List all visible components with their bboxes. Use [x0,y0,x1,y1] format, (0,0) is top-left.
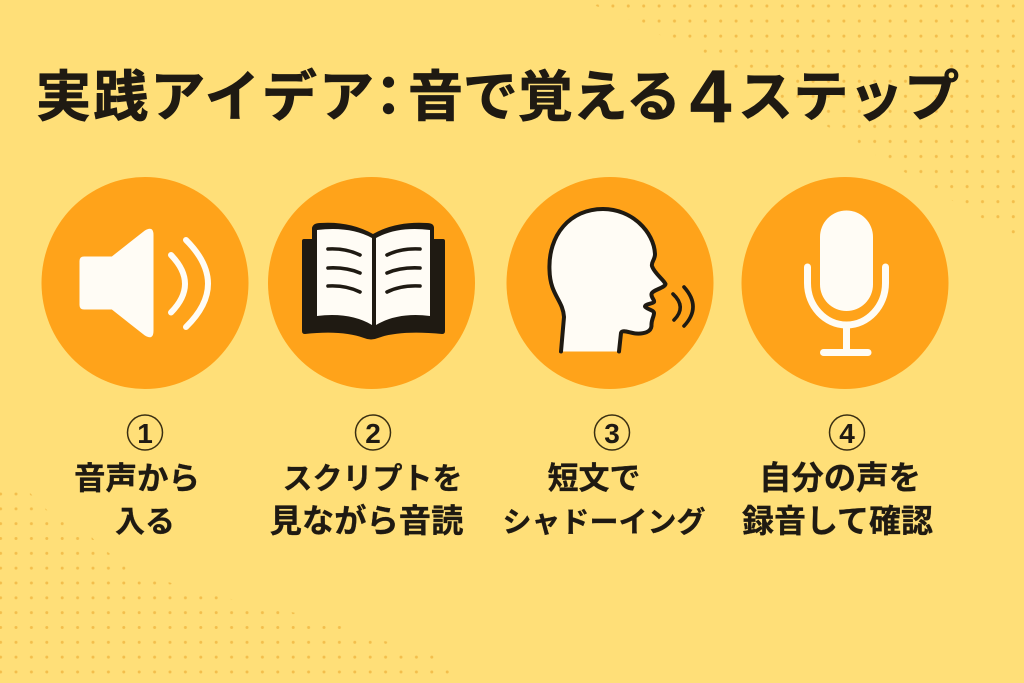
step 2 circle: open book icon [268,177,475,389]
step 1 label: 音声から [74,460,200,496]
step 2 label [270,463,463,539]
step 3 label: 短文で [548,461,640,496]
step 4 label [742,460,933,539]
title: 実践アイデア [36,66,374,128]
step 4 number [830,415,864,450]
step 1 number: 1 [137,418,153,449]
title [36,55,959,138]
title: ステップ [738,66,959,128]
step 2 label: スクリプトを [282,463,462,496]
step 3 number: 3 [604,418,620,449]
step 2 label: 見ながら音読 [270,503,463,539]
step 3 number [594,415,630,450]
title: ： [361,66,416,128]
title: 音で覚える [408,66,681,128]
step 4 label: 録音して確認 [742,503,933,539]
step 1 label: 入る [115,506,175,539]
step 3 circle: speaking head icon [506,177,714,389]
title: 4 [690,55,731,138]
step 4 circle: microphone icon [742,177,948,389]
step 3 label: シャドーイング [502,506,706,539]
step 2 number: 2 [365,418,381,449]
step 1 circle: speaker icon [42,177,248,389]
step 1 number [128,415,162,450]
step 4 number: 4 [839,418,855,449]
step 1 label [74,460,200,539]
step 4 label: 自分の声を [759,460,921,496]
step 3 label [502,461,706,539]
step 2 number [356,415,390,450]
